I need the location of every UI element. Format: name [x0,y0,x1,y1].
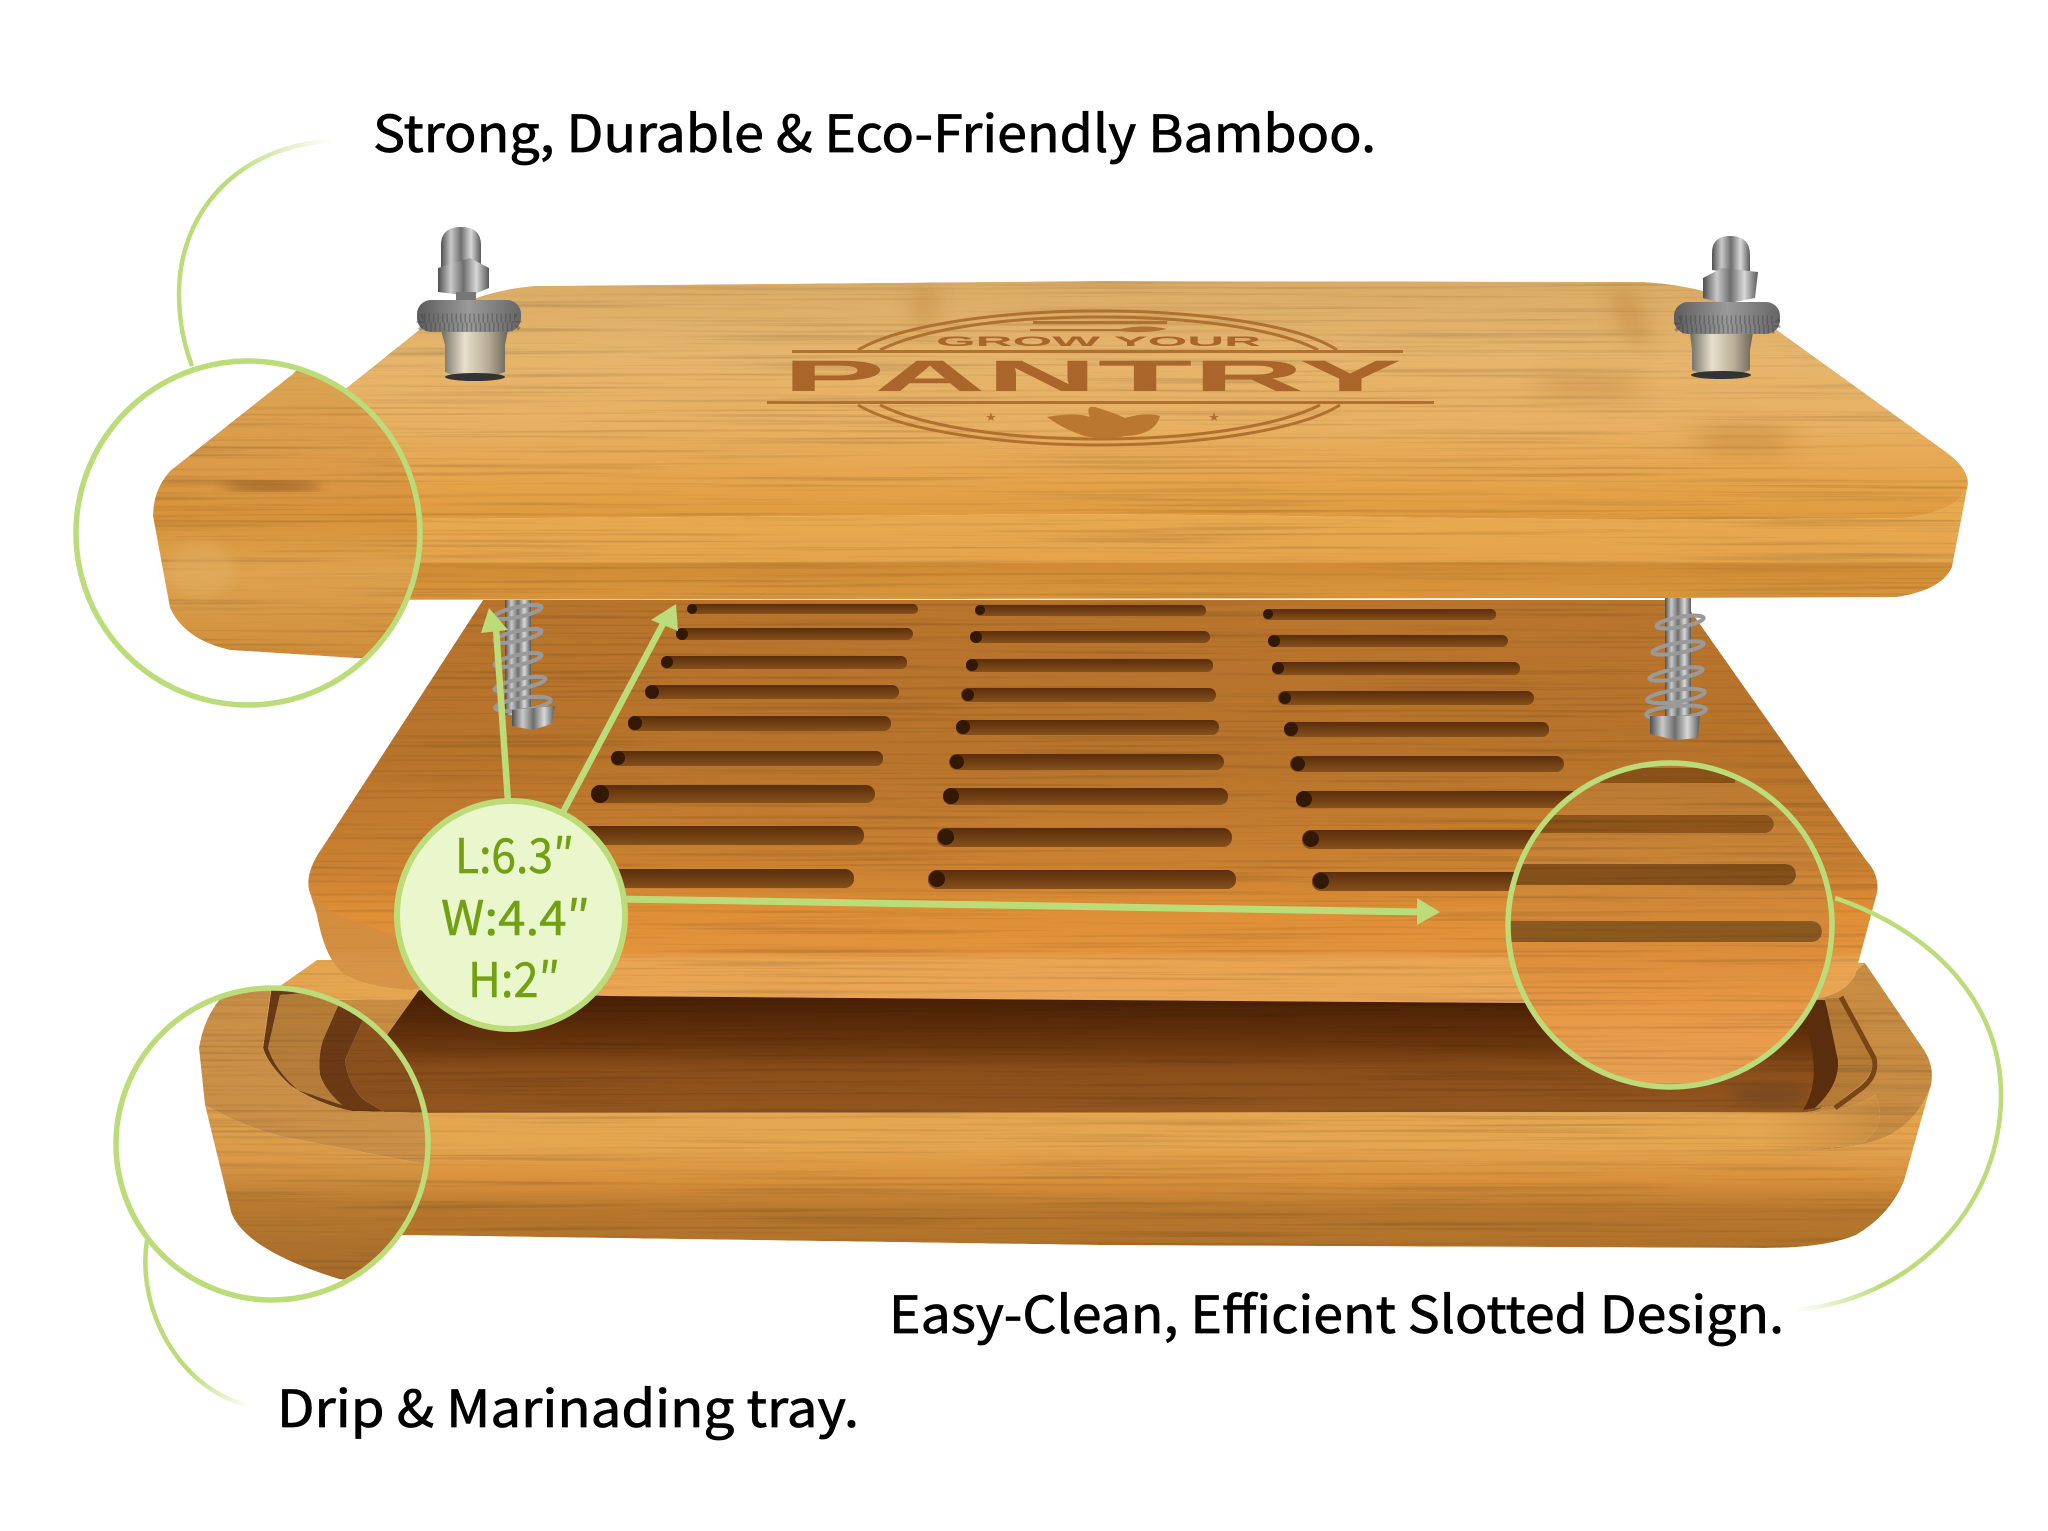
lower left bolt and spring [493,600,555,730]
magnifier: slots [1500,760,1835,1090]
dimension arrow: height [481,608,508,802]
drip tray [209,960,1932,1248]
upper left knob [417,227,521,381]
tray rim top [320,963,1932,1150]
middle column of slots [928,605,1236,889]
dimension arrow: width [562,604,678,814]
upper right knob [1674,236,1780,379]
magnifier: tray corner [116,980,440,1300]
dimension arrow: length [620,898,1440,925]
caption: bamboo: Strong, Durable & Eco-Friendly Bamboo. [373,93,1376,167]
board top face [206,281,1968,520]
dark slot ends [591,604,1329,889]
tray groove right [1795,1000,1840,1110]
caption: slotted design: Easy-Clean, Efficient Slotted Design. [889,1274,1784,1348]
engraved logo: PANTRY [782,352,1402,401]
connector curve: tray callout [145,1240,250,1406]
connector curve: slotted design callout [1795,898,2001,1310]
top press board [346,281,1968,600]
connector curve: bamboo callout [179,141,333,366]
slotted press board [308,600,1878,1003]
width value: W:4.4″ [441,879,590,949]
height value: H:2″ [468,941,560,1011]
left column of slots [550,604,918,888]
length value: L:6.3″ [455,817,574,887]
engraved logo: GROW YOUR [936,333,1261,349]
tray interior floor [342,990,1829,1113]
caption: drip tray: Drip & Marinading tray. [277,1368,859,1442]
engraved logo [767,311,1434,445]
dimensions badge [397,801,625,1029]
lower right bolt and spring [1646,598,1706,740]
right column of slots [1263,609,1600,891]
bamboo knots [913,278,1795,454]
magnifier: board corner [76,340,430,705]
board front edge [160,480,1968,600]
